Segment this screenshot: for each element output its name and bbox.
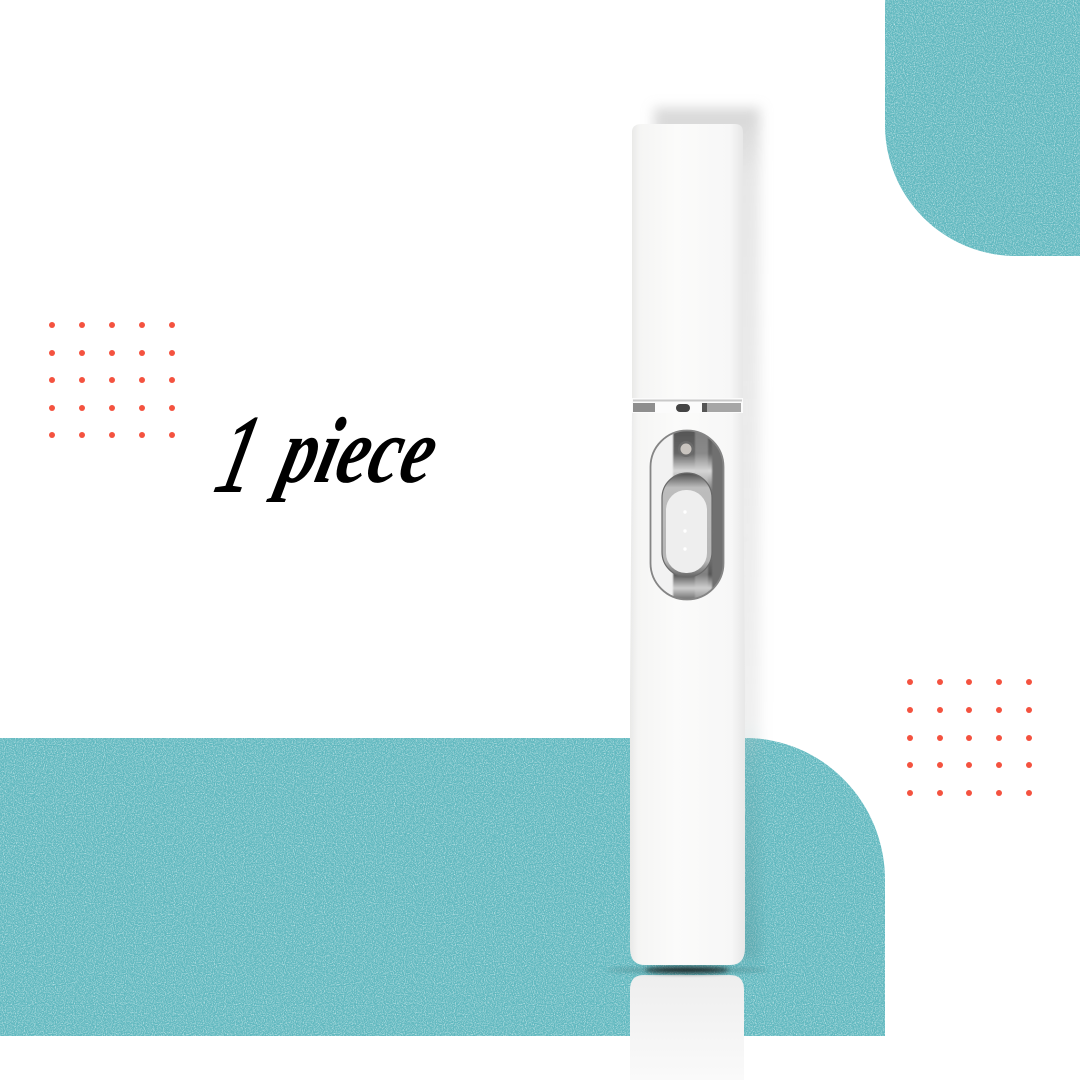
dot grid: left — [49, 322, 175, 438]
dot grid: right — [907, 679, 1032, 796]
heading: 1 piece: piece — [266, 398, 449, 503]
slider housing — [662, 473, 712, 577]
panel: bottom teal band — [0, 738, 885, 1036]
slider button — [666, 490, 707, 573]
plate rim — [650, 430, 724, 600]
pen contact shadow — [607, 967, 767, 973]
panel: top-right teal corner shape — [885, 0, 1080, 256]
pen lower body — [630, 410, 745, 965]
pen cap — [632, 124, 743, 400]
pen shadow — [654, 108, 760, 960]
switch plate — [650, 430, 724, 600]
indicator light — [678, 441, 694, 457]
slider dots — [683, 510, 687, 551]
heading: 1 piece: 1 — [206, 394, 272, 516]
product: pen device — [607, 108, 767, 1080]
pen reflection — [630, 975, 744, 1080]
heading: 1 piece — [206, 394, 449, 516]
chrome ring — [632, 398, 743, 413]
